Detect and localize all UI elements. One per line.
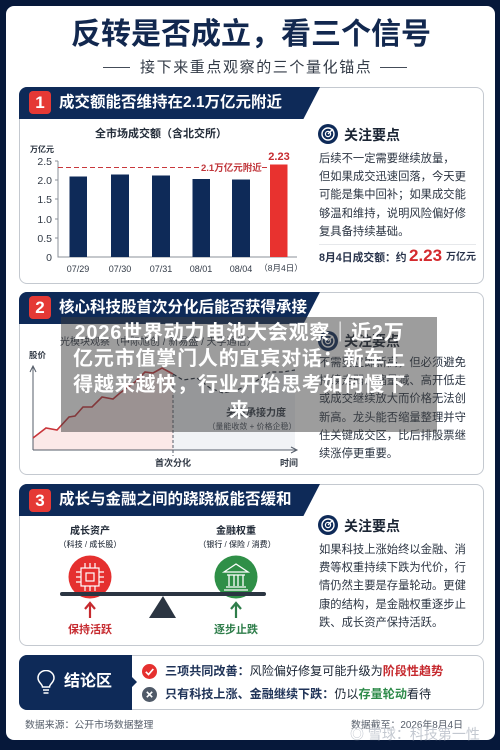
icon: target, panel 1 xyxy=(318,124,338,144)
bar chart: market turnover: 0 xyxy=(46,252,52,264)
bar chart: market turnover: 2.0 xyxy=(37,175,52,187)
panel 3 number badge xyxy=(29,489,51,512)
key points text, panel 1: 可能是集中回补；如果成交能 xyxy=(319,189,466,201)
title: 反转是否成立，看三个信号 xyxy=(71,18,431,51)
bar chart: market turnover: 2.23 xyxy=(268,151,290,163)
bar chart: market turnover: 08/01 xyxy=(190,264,212,274)
icon: cross xyxy=(142,687,157,702)
seesaw diagram xyxy=(59,524,276,636)
panel 2 number badge: 2 xyxy=(35,298,45,317)
divider note: turnover value: 万亿元 xyxy=(446,252,476,263)
bar chart: market turnover: 07/31 xyxy=(150,264,172,274)
key points text, panel 1: 后续不一定需要继续放量， xyxy=(319,153,455,165)
seesaw diagram: 逐步止跌 xyxy=(214,622,258,636)
panel 3 header bar xyxy=(19,484,320,516)
line chart: stock price divergence: 股价 xyxy=(29,350,47,360)
panel 1 number badge xyxy=(29,91,51,114)
bar chart: market turnover: 2.5 xyxy=(37,156,52,168)
headline text: 亿元市值掌门人的宜宾对话：新车上 xyxy=(73,348,406,370)
watermark: ◎ 雪球：科技第一性 xyxy=(350,726,480,742)
seesaw diagram: 保持活跃 xyxy=(68,622,112,636)
key points text, panel 2: 不需要立即新高，但必须避免 xyxy=(319,357,466,369)
key points text, panel 3: 情仍然主要是存量轮动。更健 xyxy=(319,580,466,592)
chart title: market turnover: 全市场成交额（含北交所） xyxy=(95,128,227,140)
icon: check xyxy=(142,664,157,679)
panel 1 header bar xyxy=(19,87,320,119)
line chart: stock price divergence: 首次分化 xyxy=(155,457,191,468)
footer: data date: 数据截至：2026年8月4日 xyxy=(351,720,463,731)
key points text, panel 2: 住关键成交区，比后排股票继 xyxy=(319,430,466,442)
line chart: stock price divergence: 时间 xyxy=(280,457,298,468)
bar chart: market turnover: 07/29 xyxy=(67,264,89,274)
bar chart: market turnover: 2.1万亿元附近 xyxy=(201,162,262,174)
panel 3 number badge: 3 xyxy=(35,491,45,510)
panel 2 heading: 核心科技股首次分化后能否获得承接 xyxy=(59,299,307,316)
panel 1 number badge: 1 xyxy=(35,93,45,112)
bar chart: market turnover: （8月4日） xyxy=(259,263,303,273)
footer: data source: 数据来源：公开市场数据整理 xyxy=(25,720,153,731)
key points text, panel 3 xyxy=(319,543,466,629)
conclusion line 2: 只有科技上涨、金融继续下跌：仍以存量轮动看待 xyxy=(165,687,431,701)
bar chart: market turnover: 1.5 xyxy=(37,194,52,206)
seesaw diagram: （银行 / 保险 / 消费） xyxy=(198,539,276,549)
key points text, panel 1: 复具备持续基础。 xyxy=(319,226,409,238)
key points heading, panel 1: 关注要点 xyxy=(344,127,400,143)
headline text: 来 xyxy=(229,400,250,422)
key points text, panel 2: 持续走弱、缩量减、高开低走 xyxy=(319,375,466,387)
panel: signal 3 rotation xyxy=(19,484,484,646)
key points text, panel 2: 或成交继续放大而价格无法创 xyxy=(319,393,466,405)
line chart: stock price divergence: 关键承接力度 xyxy=(226,406,286,419)
icon: target, panel 2 xyxy=(318,331,338,351)
divider note: turnover value: 2.23 xyxy=(409,246,442,265)
divider note: turnover value: 8月4日成交额：约 xyxy=(319,252,407,264)
panel 2 number badge xyxy=(29,296,51,319)
panel 2 header bar xyxy=(19,292,320,324)
seesaw diagram: （科技 / 成长股） xyxy=(59,539,121,549)
bar chart: market turnover: 万亿元 xyxy=(30,144,54,154)
key points text, panel 1: 够温和维持，说明风险偏好修 xyxy=(319,208,466,220)
key points text, panel 3: 费等权重持续下跌为代价，行 xyxy=(319,562,466,574)
key points text, panel 1 xyxy=(319,152,466,238)
line chart: stock price divergence: 光模块观察（中际旭创 / 新易盛 / 天孚通信） xyxy=(60,335,257,348)
panel: signal 2 tech stocks xyxy=(19,292,484,475)
panel: conclusion xyxy=(19,655,484,710)
bar chart: market turnover: 07/30 xyxy=(109,264,131,274)
key points heading, panel 2: 关注要点 xyxy=(344,333,400,349)
subtitle: 接下来重点观察的三个量化锚点 xyxy=(140,59,372,76)
seesaw diagram: 金融权重 xyxy=(216,524,256,537)
conclusion heading: 结论区 xyxy=(64,673,112,690)
icon: target, panel 3 xyxy=(318,515,338,535)
headline text xyxy=(73,322,406,422)
key points text, panel 3: 康的结构，是金融权重逐步止 xyxy=(319,599,466,611)
line chart: stock price divergence: （量能收敛 + 价格企稳） xyxy=(207,421,297,431)
panel: signal 1 turnover xyxy=(19,87,484,284)
key points text, panel 2: 新高。龙头能否缩量整理并守 xyxy=(319,412,466,424)
headline text: 得越来越快，行业开始思考如何慢下 xyxy=(73,374,406,396)
line chart: stock price divergence xyxy=(29,335,298,468)
panel 3 heading: 成长与金融之间的跷跷板能否缓和 xyxy=(59,491,292,508)
bar chart: market turnover xyxy=(30,144,303,274)
bar chart: market turnover: 08/04 xyxy=(230,264,252,274)
news headline overlay xyxy=(61,317,437,432)
key points text, panel 2: 续涨停更重要。 xyxy=(319,448,398,460)
key points text, panel 1: 但如果成交迅速回落，今天更 xyxy=(319,171,466,183)
panel 1 heading: 成交额能否维持在2.1万亿元附近 xyxy=(59,94,282,111)
key points text, panel 2 xyxy=(319,356,466,460)
bar chart: market turnover: 0.5 xyxy=(37,233,52,245)
conclusion dark label block xyxy=(19,655,137,710)
key points heading, panel 3: 关注要点 xyxy=(344,518,400,534)
divider note: turnover value xyxy=(319,244,476,268)
key points text, panel 3: 跌、成长资产保持活跃。 xyxy=(319,617,443,629)
seesaw diagram: 成长资产 xyxy=(70,524,110,537)
headline text: 2026世界动力电池大会观察｜近2万 xyxy=(74,322,404,344)
icon: light bulb xyxy=(37,670,55,694)
key points text, panel 3: 如果科技上涨始终以金融、消 xyxy=(319,544,466,556)
conclusion line 1: 三项共同改善：风险偏好修复可能升级为阶段性趋势 xyxy=(165,664,443,678)
bar chart: market turnover: 1.0 xyxy=(37,214,52,226)
